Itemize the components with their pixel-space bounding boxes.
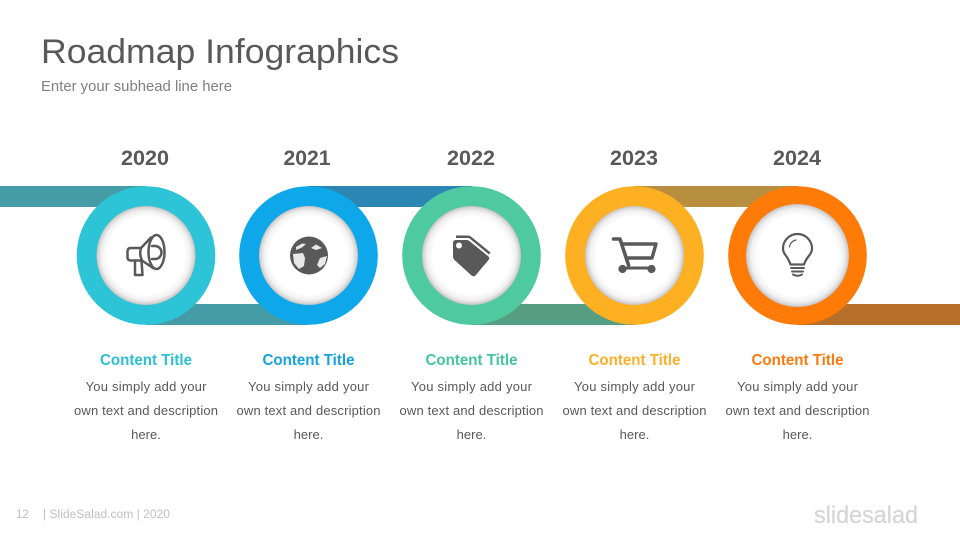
description 2020: [74, 379, 218, 442]
description 2021: [236, 379, 380, 442]
content title 2023: Content Title: [588, 352, 681, 369]
description 2022: here.: [457, 427, 486, 442]
subhead: Enter your subhead line here: [41, 79, 232, 95]
icon: shopping cart: [614, 239, 656, 273]
description 2022: [400, 379, 544, 442]
inner disc 2022: [422, 206, 521, 305]
ring 2024: [728, 186, 867, 325]
year label 2020: 2020: [121, 147, 169, 170]
icon: price tags: [453, 236, 490, 276]
ring 2022: [402, 186, 541, 325]
footer text: | SlideSalad.com | 2020: [43, 509, 170, 521]
inner disc 2023: [585, 206, 684, 305]
page number: 12: [16, 509, 29, 521]
description 2021: here.: [294, 427, 323, 442]
year label 2022: 2022: [447, 147, 495, 170]
year label 2023: 2023: [610, 147, 658, 170]
description 2020: here.: [131, 427, 161, 442]
ring 2023: [565, 186, 704, 325]
roadmap connector bars: [0, 186, 960, 325]
milestone 2023: [562, 147, 706, 442]
content title 2022: Content Title: [426, 352, 518, 369]
description 2023: [562, 379, 706, 442]
description 2024: You simply add your: [737, 379, 859, 394]
title: Roadmap Infographics: [41, 33, 399, 71]
milestone 2020: [74, 147, 218, 442]
inner disc 2021: [259, 206, 358, 305]
description 2021: own text and description: [236, 403, 380, 418]
milestone 2022: [400, 147, 544, 442]
content title 2021: Content Title: [262, 352, 355, 369]
icon: globe: [290, 236, 328, 274]
description 2021: You simply add your: [248, 379, 370, 394]
icon: megaphone: [128, 235, 164, 275]
icon: light bulb: [783, 234, 812, 276]
description 2024: own text and description: [726, 403, 870, 418]
inner disc 2024: [746, 204, 849, 307]
content title 2024: Content Title: [752, 352, 844, 369]
inner disc 2020: [96, 206, 196, 305]
description 2020: own text and description: [74, 403, 218, 418]
milestone 2024: [726, 147, 870, 442]
description 2020: You simply add your: [86, 379, 207, 394]
description 2023: own text and description: [562, 403, 706, 418]
ring 2021: [239, 186, 378, 325]
description 2024: here.: [783, 427, 812, 442]
milestone 2021: [236, 147, 380, 442]
content title 2020: Content Title: [100, 352, 192, 369]
description 2022: You simply add your: [411, 379, 533, 394]
ring 2020: [77, 186, 215, 325]
footer logo: slidesalad: [814, 502, 918, 529]
description 2023: You simply add your: [574, 379, 696, 394]
year label 2024: 2024: [773, 147, 821, 170]
description 2022: own text and description: [400, 403, 544, 418]
description 2023: here.: [620, 427, 649, 442]
year label 2021: 2021: [284, 147, 331, 170]
description 2024: [726, 379, 870, 442]
